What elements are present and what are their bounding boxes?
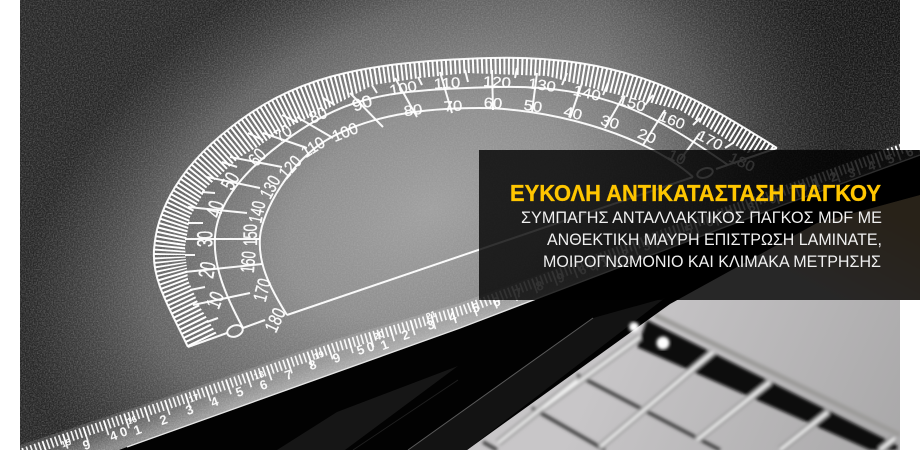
measuring scale strip: 7 xyxy=(787,182,799,199)
heading: ΕΥΚΟΛΗ ΑΝΤΙΚΑΤΑΣΤΑΣΗ ΠΑΓΚΟΥ xyxy=(510,180,881,206)
protractor outer scale numbers: 10 xyxy=(201,288,229,312)
protractor xyxy=(154,58,777,347)
protractor inner scale numbers: 160 xyxy=(236,250,260,274)
measuring scale strip: 3 xyxy=(424,316,436,333)
measuring scale strip: 4 xyxy=(107,427,120,444)
protractor outer scale numbers: 100 xyxy=(388,79,419,99)
measuring scale strip: 2 xyxy=(827,168,839,185)
measuring scale strip: 0 xyxy=(364,338,376,355)
protractor outer scale numbers: 80 xyxy=(306,104,330,128)
measuring scale strip: 5 xyxy=(682,221,694,238)
measuring scale strip: 6 xyxy=(703,213,715,230)
protractor outer scale numbers: 150 xyxy=(616,92,648,115)
measuring scale strip: 0 xyxy=(586,257,598,274)
protractor inner scale numbers: 130 xyxy=(256,172,285,202)
measuring scale strip: 0 xyxy=(117,423,129,440)
protractor outer scale numbers: 180 xyxy=(726,150,757,176)
protractor arcs and baseline xyxy=(154,58,777,347)
measuring scale strip: 9 xyxy=(766,190,778,207)
protractor inner scale numbers: 40 xyxy=(562,104,584,124)
measuring scale strip: 8 xyxy=(306,356,318,373)
protractor inner scale numbers: 170 xyxy=(250,276,276,304)
protractor outer scale numbers: 50 xyxy=(216,168,244,194)
protractor inner scale numbers: 10 xyxy=(665,147,688,169)
protractor degree ticks xyxy=(154,58,777,347)
protractor outer scale numbers: 120 xyxy=(483,74,512,91)
protractor inner scale numbers: 70 xyxy=(443,98,463,115)
black workbench edge xyxy=(119,155,920,450)
protractor inner scale numbers: 100 xyxy=(330,120,361,146)
protractor outer scale numbers: 60 xyxy=(244,144,271,170)
measuring scale strip: 21 xyxy=(425,309,437,322)
protractor outer scale numbers: 70 xyxy=(271,121,296,146)
measuring scale strip: 9 xyxy=(554,269,566,286)
measuring scale strip: 9 xyxy=(330,349,342,366)
measuring scale strip: 2 xyxy=(157,411,169,428)
protractor outer scale numbers: 160 xyxy=(656,108,687,133)
measuring scale strip: 0 xyxy=(797,178,809,195)
measuring scale strip: 3 xyxy=(183,401,195,418)
measuring scale strip: 2 xyxy=(619,245,631,262)
protractor outer scale numbers: 140 xyxy=(571,83,602,105)
protractor outer scale numbers: 40 xyxy=(201,198,229,220)
description text: ΑΝΘΕΚΤΙΚΗ ΜΑΥΡΗ ΕΠΙΣΤΡΩΣΗ LAMINATE, xyxy=(547,230,882,249)
protractor inner scale numbers: 150 xyxy=(239,224,261,246)
measuring scale strip: 2 xyxy=(399,326,411,343)
measuring scale strip: 6 xyxy=(257,376,269,393)
measuring scale strip: 5 xyxy=(233,383,245,400)
protractor outer scale numbers: 90 xyxy=(349,91,375,115)
measuring scale strip: 7 xyxy=(724,205,736,222)
description text xyxy=(521,208,882,271)
protractor outer scale numbers: 30 xyxy=(192,231,217,247)
measuring scale strip: 7 xyxy=(512,284,524,301)
protractor inner scale numbers: 140 xyxy=(245,199,270,225)
protractor outer scale numbers: 110 xyxy=(433,75,461,92)
measuring scale strip: 4 xyxy=(661,229,674,246)
measuring scale strip: 6 xyxy=(490,293,502,310)
protractor inner scale numbers: 60 xyxy=(483,95,503,112)
measuring scale strip: 16 xyxy=(126,414,138,427)
protractor inner scale numbers: 180 xyxy=(261,305,290,336)
measuring scale strip: 1 xyxy=(378,336,390,353)
protractor inner scale numbers: 120 xyxy=(276,153,306,183)
measuring scale strip: 8 xyxy=(745,198,757,215)
measuring scale strip: 4 xyxy=(446,308,459,325)
measuring scale strip: 3 xyxy=(845,164,857,181)
protractor inner scale numbers: 110 xyxy=(299,134,329,162)
measuring scale strip: 4 xyxy=(865,157,878,174)
measuring scale strip: 5 xyxy=(354,341,366,358)
protractor inner scale numbers: 20 xyxy=(635,126,659,148)
protractor outer scale numbers: 130 xyxy=(527,76,557,96)
measuring scale strip: 1 xyxy=(598,253,610,270)
measuring scale strip: 1 xyxy=(131,421,143,438)
protractor inner scale numbers: 80 xyxy=(403,102,424,120)
caption panel background xyxy=(479,150,920,300)
measuring scale strip: 17 xyxy=(188,392,200,405)
protractor outer scale numbers: 20 xyxy=(193,260,220,280)
protractor outer scale numbers xyxy=(192,74,757,312)
measuring scale strip: 4 xyxy=(208,393,221,410)
measuring scale strip: 15 xyxy=(60,437,72,450)
measuring scale strip: 6 xyxy=(903,143,915,160)
description text: ΜΟΙΡΟΓΝΩΜΟΝΙΟ ΚΑΙ ΚΛΙΜΑΚΑ ΜΕΤΡΗΣΗΣ xyxy=(543,252,881,271)
measuring scale strip xyxy=(20,136,920,450)
protractor inner scale numbers: 50 xyxy=(523,98,543,116)
measuring scale strip: 6 xyxy=(576,261,588,278)
measuring scale strip: 18 xyxy=(253,369,265,382)
rack highlight dots xyxy=(629,322,670,350)
measuring scale strip: 3 xyxy=(640,237,652,254)
protractor inner scale numbers: 30 xyxy=(599,113,621,133)
measuring scale strip: 7 xyxy=(282,366,294,383)
protractor outer scale numbers: 170 xyxy=(694,127,725,154)
measuring scale strip: 20 xyxy=(373,329,385,342)
description text: ΣΥΜΠΑΓΗΣ ΑΝΤΑΛΛΑΚΤΙΚΟΣ ΠΑΓΚΟΣ MDF ΜΕ xyxy=(521,208,882,227)
light grey floor with wire rack xyxy=(467,195,920,450)
measuring scale strip: 19 xyxy=(313,349,325,362)
protractor inner scale numbers xyxy=(236,95,688,336)
measuring scale strip: 5 xyxy=(884,150,896,167)
measuring scale strip: 8 xyxy=(533,277,545,294)
measuring scale strip: 1 xyxy=(809,174,821,191)
measuring scale strip: 5 xyxy=(469,299,481,316)
